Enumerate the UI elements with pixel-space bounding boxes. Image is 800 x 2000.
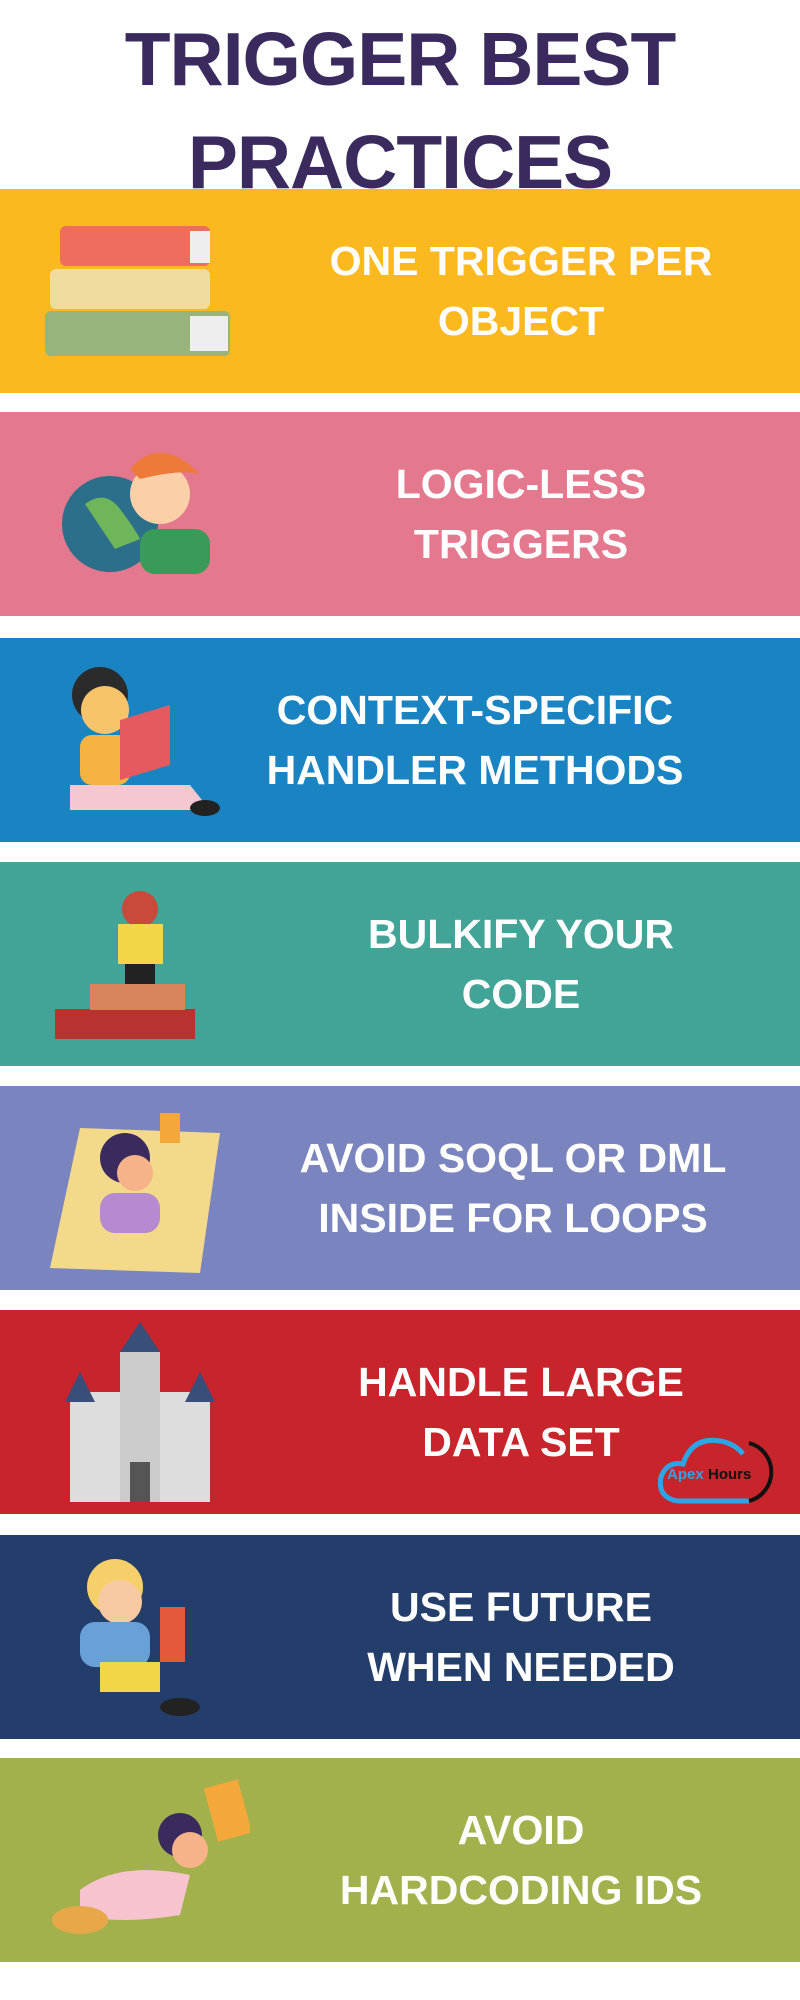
text: AVOID SOQL OR DML	[300, 1135, 726, 1181]
text: WHEN NEEDED	[367, 1644, 675, 1690]
panel: avoid soql or dml inside for loops	[0, 1086, 800, 1290]
logo: Apex Hours: Apex	[667, 1466, 704, 1483]
panel: context-specific handler methods	[0, 638, 800, 842]
text: ONE TRIGGER PER	[330, 238, 712, 284]
panel: use future when needed	[0, 1535, 800, 1739]
logo: Apex Hours: Hours	[708, 1466, 751, 1483]
text	[300, 1135, 726, 1241]
text	[358, 1359, 684, 1465]
icon: castle	[65, 1322, 215, 1502]
text: DATA SET	[422, 1419, 620, 1465]
panel: logic-less triggers	[0, 412, 800, 616]
title: TRIGGER BEST	[125, 17, 675, 101]
logo: Apex Hours	[658, 1438, 774, 1504]
text: LOGIC-LESS	[396, 461, 646, 507]
text: TRIGGERS	[414, 521, 628, 567]
text: HANDLE LARGE	[358, 1359, 684, 1405]
text	[396, 461, 646, 567]
icon: book stack	[45, 226, 230, 356]
text	[267, 687, 683, 793]
icon: boy reading	[80, 1559, 200, 1716]
text: AVOID	[458, 1807, 584, 1853]
text: BULKIFY YOUR	[368, 911, 674, 957]
text: HARDCODING IDS	[340, 1867, 702, 1913]
icon: kid with globe	[62, 452, 210, 574]
text	[367, 1584, 675, 1690]
text	[368, 911, 674, 1017]
icon: girl reading	[70, 667, 220, 816]
icon: kid on books	[55, 891, 195, 1039]
text	[340, 1807, 702, 1913]
text: INSIDE FOR LOOPS	[318, 1195, 708, 1241]
panel: bulkify your code	[0, 862, 800, 1066]
text	[330, 238, 712, 344]
text: CONTEXT-SPECIFIC	[277, 687, 673, 733]
panel: one trigger per object	[0, 189, 800, 393]
title: PRACTICES	[188, 120, 612, 204]
icon: kid lying reading	[52, 1780, 250, 1934]
text: CODE	[462, 971, 580, 1017]
panel: avoid hardcoding ids	[0, 1758, 800, 1962]
icon: kid on map	[50, 1113, 220, 1273]
text: HANDLER METHODS	[267, 747, 683, 793]
title	[125, 17, 676, 204]
text: USE FUTURE	[390, 1584, 652, 1630]
text: OBJECT	[438, 298, 604, 344]
panel: handle large data set	[0, 1310, 800, 1514]
